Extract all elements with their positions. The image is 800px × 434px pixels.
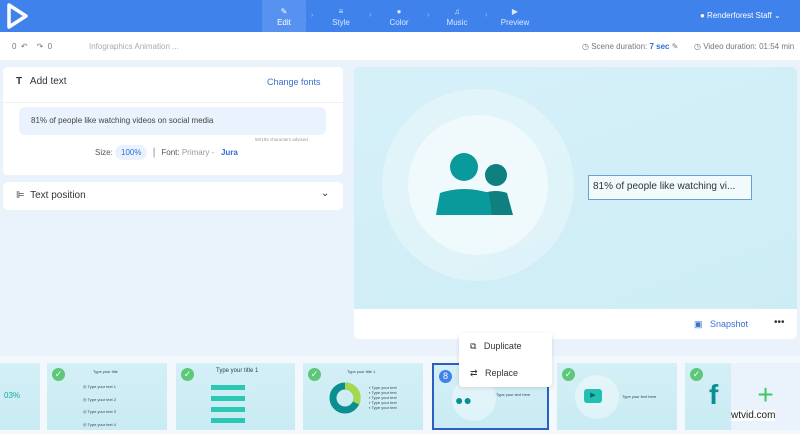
tab: color [389,7,409,27]
user menu: ● Renderforest Staff ⌄ [700,11,781,20]
heading: T Add text [16,76,67,87]
text box: 81% of people like watching vi... [593,181,735,192]
thumb 5 selected [432,363,549,430]
thumb 4: ▪ Type your text [369,395,397,400]
tab: preview [501,7,530,27]
logo [7,3,28,29]
more menu: ••• [774,317,785,328]
header bar: › [311,12,313,19]
thumbnail strip [0,356,800,434]
add scene button: + [757,379,774,410]
context menu [459,333,552,387]
tab: style: Style [332,18,350,27]
thumb 5 selected: ●● [455,392,472,408]
duplicate item: ⧉ Duplicate [470,341,521,351]
project name: Infographics Animation ... [89,42,179,51]
size/font row: Size: 100% │ Font: Primary - Jura [95,148,238,157]
thumb 6: ▶ [590,392,596,399]
watermark: wtvid.com [731,410,775,421]
thumb 4: ▪ Type your text [369,405,397,410]
tab: edit: ✎ [281,7,287,16]
thumb 4 [303,363,423,430]
header bar [0,0,800,32]
outer circle [382,89,574,281]
thumb 7 [685,363,735,430]
thumb 7: f [709,379,718,410]
panel: add text [3,67,343,175]
thumb 4: ▪ Type your text [369,390,397,395]
icon: people [436,153,513,215]
scene duration: ◷ Scene duration: 7 sec ✎ [582,42,678,51]
thumb 2: ◎ Type your text 4 [83,422,116,426]
thumb 2: Type your title [93,369,118,374]
thumb 2: ◎ Type your text 2 [83,396,116,402]
thumb 4: ▪ Type your text [369,400,397,405]
snapshot button: ▣ Snapshot [694,319,748,329]
tab: color: ● [397,7,401,16]
tab: preview: Preview [501,18,529,27]
thumb 4: ▪ Type your text [369,385,397,390]
change fonts link: Change fonts [267,77,321,87]
thumb 2: ◎ Type your text 3 [83,409,116,414]
preview canvas [354,67,797,309]
thumb 2: ✓ [55,369,62,379]
tab: music [447,7,468,27]
panel: text position: ⌄ [321,188,329,199]
undo redo: 0 ↶ ↷ 0 [12,42,52,51]
panel: preview [354,67,797,339]
toolbar [0,32,800,60]
text input: 81% of people like watching videos on social media [31,116,213,125]
char counter: 50/192 characters advised [255,137,308,142]
text input [19,107,326,135]
tab: style: ≡ [339,7,343,16]
thumb 3: ✓ [184,369,191,379]
thumb 4: Type your title 1 [347,369,375,374]
tab: music: Music [447,18,467,27]
tab: preview: ▶ [512,7,518,16]
panel: text position [3,182,343,210]
tab: edit [262,0,306,32]
replace item: ⇄ Replace [470,368,518,378]
thumb 3 [176,363,295,430]
header bar: › [485,12,487,19]
thumb 6 [557,363,677,430]
thumb 3: Type your title 1 [216,368,258,374]
add scene button [731,363,800,430]
thumb 7: ✓ [693,369,700,379]
inner circle [408,115,548,255]
thumb 6: Type your text here [622,394,656,399]
tab: music: ♫ [454,7,460,16]
tab: color: Color [389,18,409,27]
thumb 5 selected: 8 [443,371,448,381]
thumb 4: ✓ [311,369,318,379]
panel: text position: ⊫ Text position [16,190,86,201]
header bar: › [427,12,429,19]
thumb 2 [47,363,167,430]
thumb 5 selected: Type your text here [496,392,530,397]
thumb 1 [0,363,40,430]
video duration: ◷ Video duration: 01:54 min [694,42,794,51]
tab: style [332,7,350,27]
header bar: › [369,12,371,19]
thumb 1: 03% [4,391,20,400]
text box [588,175,752,200]
thumb 2: ◎ Type your text 1 [83,384,116,389]
thumb 6: ✓ [565,369,572,379]
tab: edit: Edit [277,18,291,27]
